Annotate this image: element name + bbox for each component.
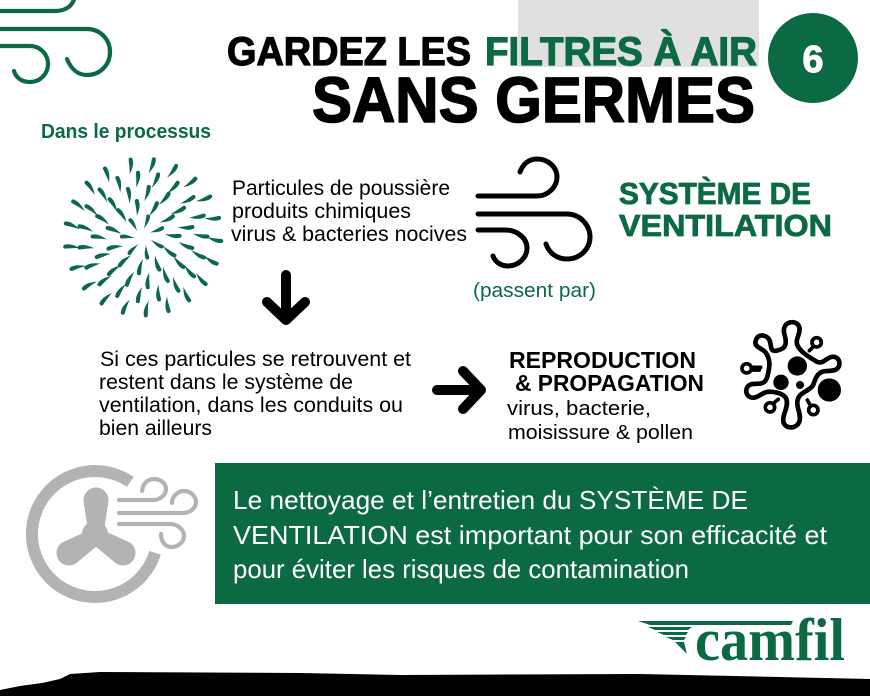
number badge: 6: [802, 39, 824, 81]
decorative grey block behind title: [518, 0, 759, 67]
text: particles list: produits chimiques: [232, 200, 411, 223]
text: particles list: [231, 177, 467, 246]
text: reproduction and propagation: virus, bacterie,: [507, 398, 651, 420]
text: reproduction and propagation: REPRODUCTION: [509, 347, 696, 373]
text: reproduction and propagation: & PROPAGATION: [515, 370, 704, 396]
text: particles stay in the system: bien ailleurs: [99, 417, 212, 440]
text: reproduction and propagation: moisissure & pollen: [508, 422, 693, 444]
icon: green wind top left: [0, 0, 110, 82]
text: reproduction and propagation: [507, 347, 704, 444]
number badge: [768, 13, 858, 103]
banner text: [233, 485, 828, 584]
text: particles list: virus & bacteries nocives: [231, 223, 467, 246]
arrow: right: [437, 371, 481, 409]
subheading: dans le processus: Dans le processus: [41, 121, 211, 143]
heading: systeme de ventilation: SYSTÈME DE: [619, 176, 811, 211]
title: [227, 29, 757, 136]
icon: particle burst: [63, 157, 223, 317]
title: FILTRES À AIR: [485, 29, 757, 74]
panel: green banner: [215, 463, 870, 604]
text: particles stay in the system: [99, 348, 411, 440]
banner text: Le nettoyage et l’entretien du SYSTÈME DE: [233, 485, 748, 515]
title: GARDEZ LES: [227, 30, 471, 74]
text: particles stay in the system: restent dans le système de: [99, 371, 353, 394]
icon: grey fan with wind: [32, 471, 196, 597]
text: particles stay in the system: ventilation, dans les conduits ou: [99, 394, 403, 417]
heading: systeme de ventilation: VENTILATION: [619, 208, 832, 243]
icon: black wind: [478, 159, 590, 266]
icon: virus: [742, 322, 841, 427]
text: particles stay in the system: Si ces particules se retrouvent et: [100, 348, 411, 371]
text: particles list: Particules de poussière: [232, 177, 450, 200]
label: passent par: (passent par): [473, 280, 596, 302]
title: SANS GERMES: [312, 64, 755, 136]
banner text: pour éviter les risques de contamination: [233, 554, 689, 584]
arrow: down: [267, 275, 305, 320]
banner text: VENTILATION est important pour son efficacité et: [233, 520, 828, 550]
black brush stroke footer: [0, 672, 870, 696]
heading: systeme de ventilation: [619, 176, 832, 243]
logo: camfil: [638, 607, 845, 673]
logo: camfil: camfil: [695, 607, 845, 673]
